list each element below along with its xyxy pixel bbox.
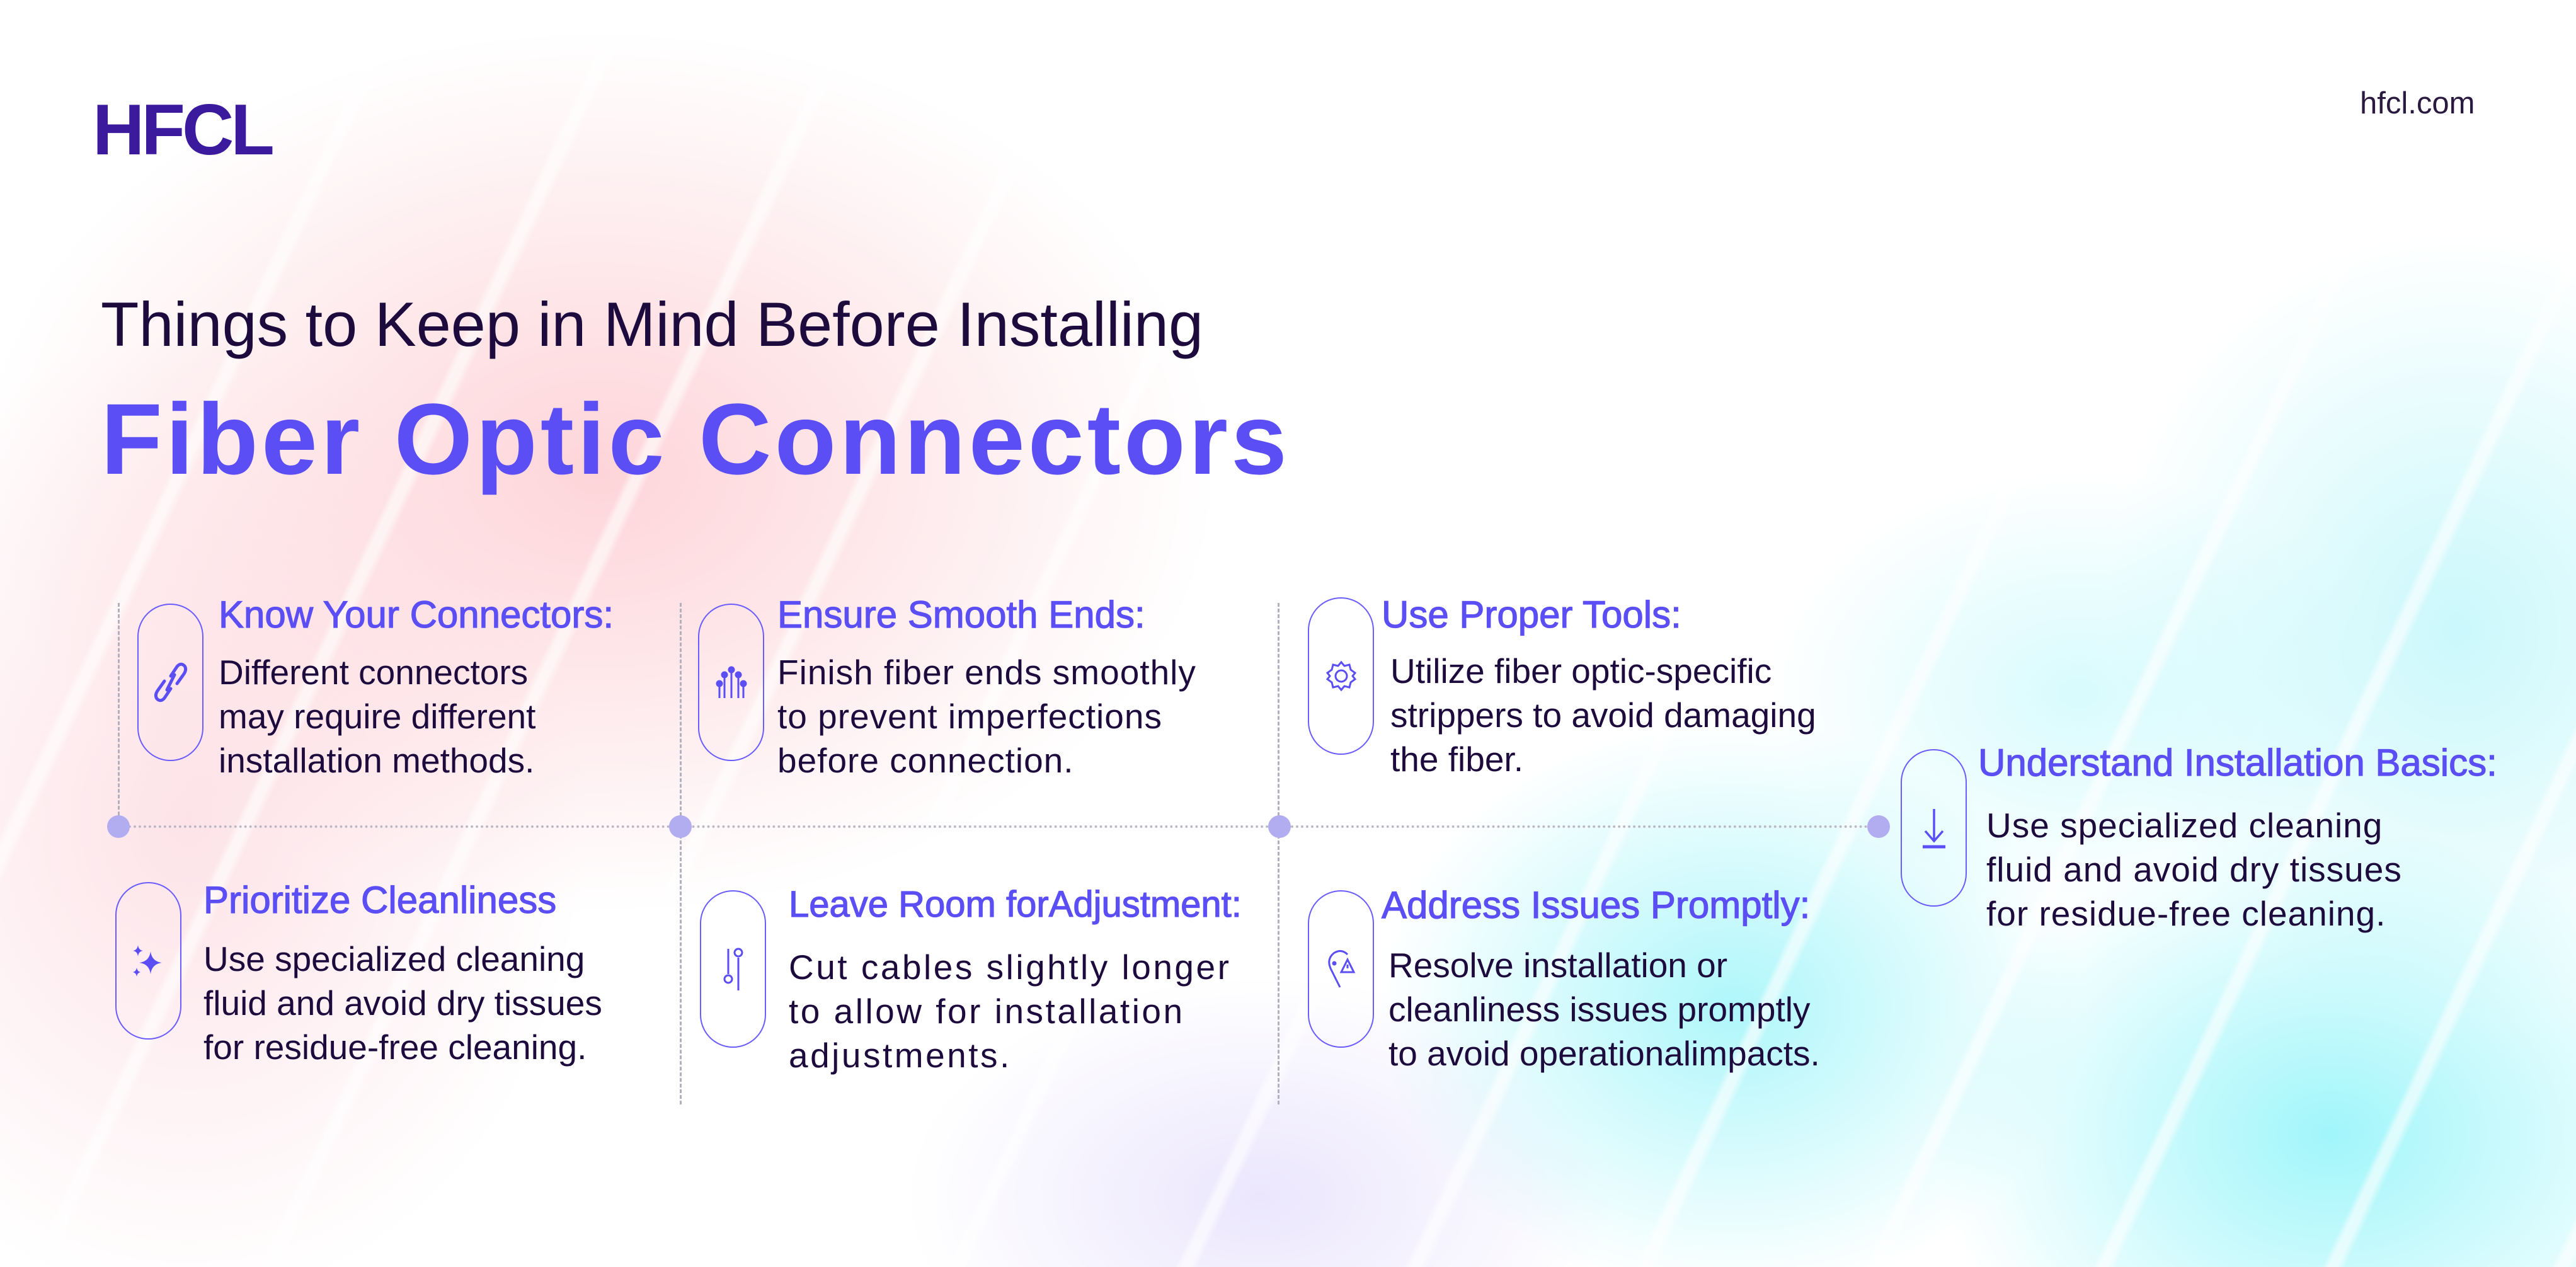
icon: pin warning	[1308, 890, 1374, 1048]
card: Use Proper Tools: strippers to avoid damaging	[1390, 696, 1816, 735]
card: Prioritize Cleanliness: fluid and avoid dry tissues	[203, 983, 602, 1023]
card: Ensure Smooth Ends: Ensure Smooth Ends:	[777, 593, 1145, 636]
icon: sparkles	[115, 882, 181, 1040]
logo: HFCL	[93, 90, 272, 170]
card: Know Your Connectors	[137, 593, 614, 780]
card: Address Issues Promptly: Address Issues Promptly:	[1382, 884, 1810, 926]
card: Address Issues Promptly: cleanliness issues promptly	[1388, 990, 1810, 1029]
card: Leave Room for Adjustment	[700, 884, 1242, 1075]
card: Understand Installation Basics: for residue-free cleaning.	[1986, 894, 2386, 933]
card: Ensure Smooth Ends	[698, 593, 1196, 780]
card: Leave Room for Adjustment: to allow for installation	[789, 992, 1185, 1031]
card: Use Proper Tools: Utilize fiber optic-specific	[1390, 651, 1772, 691]
icon: gear	[1308, 597, 1374, 755]
card: Know Your Connectors: installation methods.	[219, 741, 534, 780]
card: Address Issues Promptly: to avoid operationalimpacts.	[1388, 1034, 1820, 1073]
card: Prioritize Cleanliness: Prioritize Cleanliness	[203, 879, 556, 921]
card: Know Your Connectors: Different connectors	[219, 653, 528, 692]
icon: adjustment	[700, 890, 766, 1048]
card: Understand Installation Basics	[1901, 742, 2497, 933]
card: Ensure Smooth Ends: Finish fiber ends smoothly	[777, 653, 1196, 692]
card: Address Issues Promptly	[1308, 884, 1820, 1073]
website: hfcl.com	[2360, 86, 2475, 120]
card: Prioritize Cleanliness	[115, 879, 602, 1067]
title line 1: Things to Keep in Mind Before Installing	[101, 289, 1203, 359]
card: Leave Room for Adjustment: Leave Room forAdjustment:	[789, 884, 1242, 925]
card: Use Proper Tools: the fiber.	[1390, 740, 1523, 779]
card: Leave Room for Adjustment: Cut cables slightly longer	[789, 948, 1231, 987]
card: Prioritize Cleanliness: Use specialized cleaning	[203, 939, 585, 978]
card: Address Issues Promptly: Resolve installation or	[1388, 946, 1727, 985]
card: Ensure Smooth Ends: to prevent imperfections	[777, 697, 1162, 736]
card: Prioritize Cleanliness: for residue-free cleaning.	[203, 1028, 587, 1067]
card: Understand Installation Basics: Use specialized cleaning	[1986, 806, 2383, 845]
icon: link	[137, 604, 203, 761]
icon: download	[1901, 749, 1967, 907]
card: Use Proper Tools: Use Proper Tools:	[1382, 593, 1681, 636]
card: Use Proper Tools	[1308, 593, 1816, 779]
title line 2: Fiber Optic Connectors	[101, 382, 1290, 495]
card: Understand Installation Basics: Understand Installation Basics:	[1978, 742, 2497, 784]
card: Ensure Smooth Ends: before connection.	[777, 741, 1074, 780]
card: Know Your Connectors: Know Your Connectors:	[219, 593, 614, 636]
card: Leave Room for Adjustment: adjustments.	[789, 1036, 1012, 1075]
card: Understand Installation Basics: fluid and avoid dry tissues	[1986, 850, 2402, 889]
card: Know Your Connectors: may require different	[219, 697, 535, 736]
icon: fiber ends	[698, 604, 764, 761]
